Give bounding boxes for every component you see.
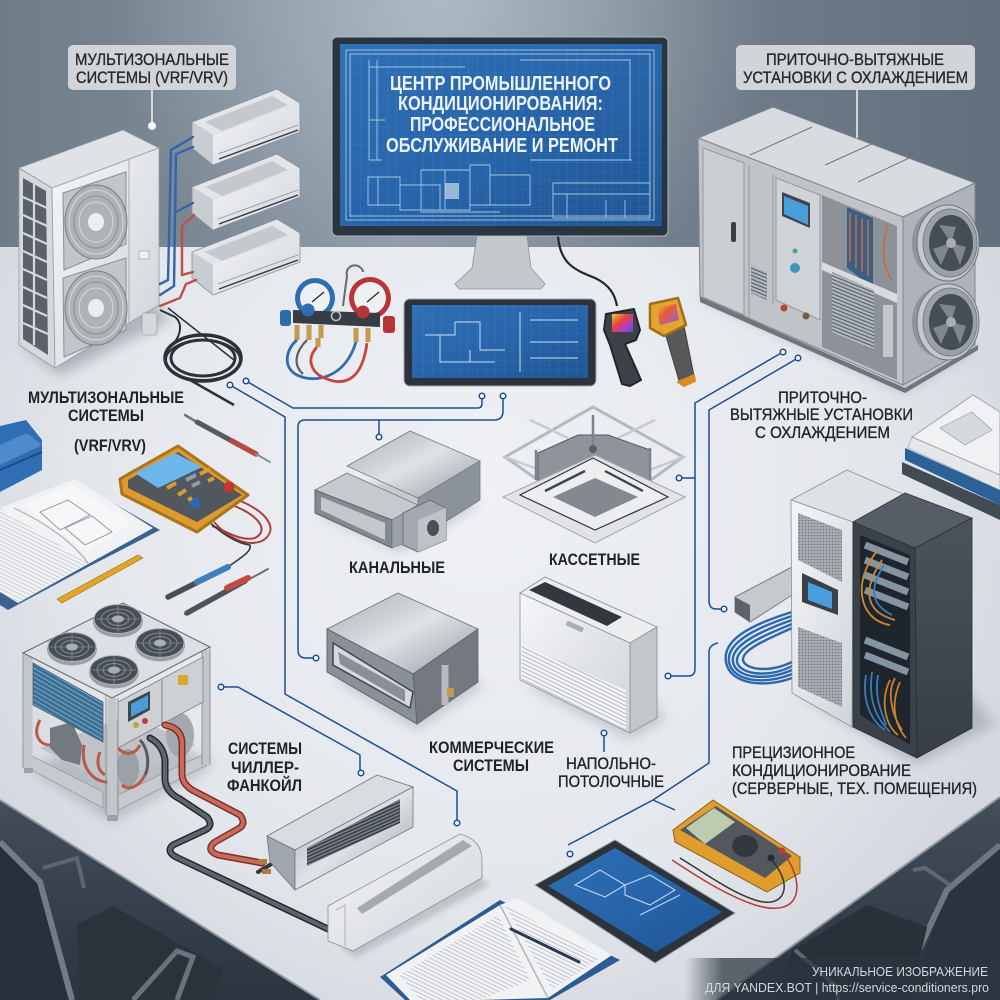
fan bottom <box>63 258 126 357</box>
monitor <box>332 37 668 306</box>
callout: AHU: УСТАНОВКИ С ОХЛАЖДЕНИЕМ <box>743 68 968 87</box>
desk surface <box>0 247 1000 1000</box>
label: commercial: КОММЕРЧЕСКИЕ <box>429 738 554 757</box>
label: AHU <box>730 388 913 442</box>
tablet: top <box>404 299 596 386</box>
chiller <box>23 603 215 822</box>
connector lines <box>221 352 798 845</box>
fan coil unit <box>258 775 413 890</box>
screen grid <box>340 44 662 226</box>
white cabinet <box>791 470 905 522</box>
tablet: bottom <box>535 840 735 963</box>
ducted unit <box>315 431 480 552</box>
label: chiller: СИСТЕМЫ <box>228 739 302 758</box>
ducted top <box>347 431 480 498</box>
ducted right side <box>418 461 480 525</box>
gauges <box>295 278 335 318</box>
monitor title: ПРОФЕССИОНАЛЬНОЕ <box>410 114 595 136</box>
air handling unit <box>698 107 979 393</box>
AHU open bays <box>822 195 897 380</box>
label: VRF desk: (VRF/VRV) <box>74 436 146 455</box>
monitor cable <box>558 236 617 306</box>
AHU front <box>698 138 903 385</box>
multimeter: left <box>120 446 270 567</box>
commercial ducted unit <box>327 593 485 730</box>
blue cable coils <box>726 612 792 683</box>
monitor screen <box>340 44 662 226</box>
watermark: ДЛЯ YANDEX.BOT | https://service-conditioners.pro <box>705 980 989 995</box>
chiller machinery <box>37 720 50 745</box>
monitor title: ЦЕНТР ПРОМЫШЛЕННОГО <box>390 73 611 95</box>
label: AHU: С ОХЛАЖДЕНИЕМ <box>755 423 890 442</box>
valve fittings <box>442 665 448 705</box>
probe: top <box>185 415 270 462</box>
books: right <box>902 395 1000 520</box>
connector nodes <box>218 349 801 857</box>
cable box <box>735 567 792 622</box>
callout: AHU: ПРИТОЧНО-ВЫТЯЖНЫЕ <box>766 50 944 69</box>
nameplate and service box <box>139 251 149 259</box>
watermark: УНИКАЛЬНОЕ ИЗОБРАЖЕНИЕ <box>812 964 988 979</box>
chiller posts <box>28 650 206 815</box>
unit front <box>52 148 159 368</box>
callout: VRF <box>68 45 236 130</box>
desk front edge <box>0 797 1000 1000</box>
chair: right <box>773 845 1000 1000</box>
callout: VRF: МУЛЬТИЗОНАЛЬНЫЕ <box>75 50 229 69</box>
wall glow <box>0 0 1000 248</box>
monitor title: ОБСЛУЖИВАНИЕ И РЕМОНТ <box>386 135 618 157</box>
label: AHU: ПРИТОЧНО- <box>778 388 867 407</box>
chiller pipes <box>150 725 328 929</box>
floor-ceiling unit <box>520 577 665 740</box>
ducted collar <box>315 473 418 520</box>
hook <box>343 265 363 306</box>
callout: AHU <box>736 45 975 159</box>
monitor bezel <box>332 37 668 236</box>
opening <box>333 643 413 708</box>
label: VRF desk: СИСТЕМЫ <box>68 406 144 425</box>
label: floor-ceiling: ПОТОЛОЧНЫЕ <box>558 772 664 791</box>
ceiling frame <box>505 407 683 520</box>
under-desk floor <box>0 700 1000 1000</box>
label: VRF desk: МУЛЬТИЗОНАЛЬНЫЕ <box>28 388 184 407</box>
cassette unit <box>503 407 685 543</box>
meter leads <box>207 500 270 567</box>
server rack <box>726 470 995 765</box>
thermal camera: dark <box>604 309 641 386</box>
cassette panel <box>503 455 685 543</box>
AHU side <box>903 183 975 385</box>
dark cabinet <box>853 493 972 548</box>
AHU top <box>698 107 975 217</box>
AHU control panel <box>776 178 820 320</box>
monitor title: КОНДИЦИОНИРОВАНИЯ: <box>398 93 603 115</box>
label: precision: КОНДИЦИОНИРОВАНИЕ <box>732 761 911 780</box>
chiller coil <box>33 663 103 742</box>
ducted motor box <box>403 500 446 552</box>
split units <box>192 89 300 295</box>
refrigerant pipes <box>160 137 196 306</box>
label: AHU: ВЫТЯЖНЫЕ УСТАНОВКИ <box>730 405 913 424</box>
hoses <box>287 340 356 379</box>
label: commercial <box>429 738 554 775</box>
thermal camera: orange <box>650 298 695 386</box>
wall unit: lower <box>328 834 490 958</box>
hatch block <box>445 183 459 199</box>
AHU door panel <box>703 148 744 315</box>
label: VRF desk <box>28 388 184 455</box>
background wall <box>0 0 1000 248</box>
label: floor-ceiling <box>558 754 664 791</box>
AHU base <box>700 297 978 393</box>
rack bay <box>860 535 910 745</box>
monitor title <box>386 73 618 157</box>
label: chiller <box>227 739 302 795</box>
chiller panel <box>118 657 203 748</box>
book: bottom <box>380 898 620 1000</box>
label: chiller: ЧИЛЛЕР- <box>231 758 299 777</box>
chair: left <box>0 842 223 1000</box>
unit top <box>19 130 159 188</box>
blueprint drawing <box>346 50 654 220</box>
label: precision: ПРЕЦИЗИОННОЕ <box>732 743 855 762</box>
label: commercial: СИСТЕМЫ <box>453 756 529 775</box>
label: chiller: ФАНКОЙЛ <box>227 776 302 795</box>
label: ducted: КАНАЛЬНЫЕ <box>349 558 445 577</box>
chiller top <box>23 603 210 698</box>
pencil <box>57 555 143 603</box>
probes: lower <box>168 567 268 614</box>
pen <box>511 929 579 962</box>
cassette housing <box>538 435 650 515</box>
monitor stand <box>455 236 545 289</box>
label: cassette: КАССЕТНЫЕ <box>549 550 640 569</box>
unit side grille <box>19 168 55 368</box>
label: floor-ceiling: НАПОЛЬНО- <box>566 754 656 773</box>
manifold gauges <box>280 265 395 382</box>
AHU ducts <box>912 205 979 281</box>
manual: left <box>0 479 160 610</box>
cable coil <box>160 308 241 405</box>
watermark <box>685 958 1000 1000</box>
outdoor VRF unit <box>19 130 170 375</box>
fan top <box>63 172 126 270</box>
manifold body <box>293 310 380 327</box>
chiller base <box>28 755 103 808</box>
callout: VRF: СИСТЕМЫ (VRF/VRV) <box>76 68 228 87</box>
label: precision <box>732 743 977 798</box>
chiller feet <box>24 768 33 773</box>
toolbox <box>0 420 42 492</box>
multimeter: bottom <box>672 800 800 908</box>
